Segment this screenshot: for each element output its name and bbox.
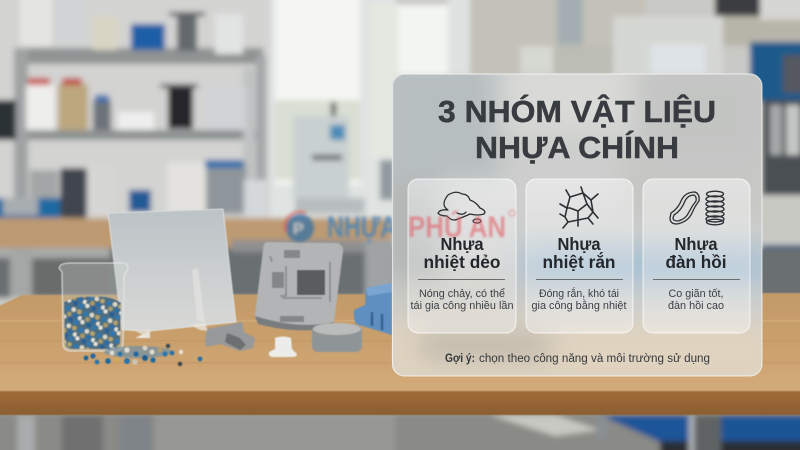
card description: Đóng rắn, khó tái — [539, 287, 619, 300]
card heading — [542, 234, 616, 272]
blue plastic part — [354, 283, 392, 335]
metal shelf — [14, 48, 266, 218]
card description: Co giãn tốt, — [668, 288, 724, 300]
footer hint: chọn theo công năng và môi trường sử dụng — [479, 353, 710, 365]
title: NHỰA CHÍNH — [475, 130, 679, 165]
card description: tái gia công nhiều lần — [410, 300, 514, 312]
card heading: nhiệt dẻo — [424, 252, 500, 272]
card description — [668, 288, 724, 312]
beaker with pellets — [59, 263, 128, 351]
card heading: Nhựa — [440, 234, 484, 254]
card heading: Nhựa — [558, 234, 601, 254]
card description — [532, 287, 626, 312]
watermark behind glass: logo and NHỰA — [285, 211, 397, 244]
card: nhựa đàn hồi — [643, 179, 750, 333]
grey screw cap — [312, 323, 362, 352]
window — [270, 0, 470, 230]
floor beneath table — [0, 412, 800, 450]
grey housing part — [255, 242, 343, 330]
grey clip part — [205, 322, 255, 351]
card description — [410, 288, 514, 312]
icon: melted plastic blob — [438, 192, 485, 223]
icon: cross-linked network — [560, 187, 598, 228]
icon: elastic loop — [670, 192, 699, 224]
card description: Nóng chảy, có thể — [419, 288, 505, 300]
title: 3 NHÓM VẬT LIỆU — [438, 93, 716, 129]
shelf items — [0, 0, 266, 224]
wooden table — [0, 293, 800, 415]
back bench — [0, 218, 392, 248]
icon: coil spring — [706, 191, 724, 225]
machine cabinet — [613, 0, 800, 295]
watermark behind glass: logo and NHỰA: P — [293, 221, 304, 238]
watermark PHÚ AN: PHÚ AN — [408, 210, 506, 244]
frosted plastic sheet — [108, 209, 236, 338]
card heading — [666, 234, 726, 272]
card heading: Nhựa — [674, 234, 718, 254]
card heading: nhiệt rắn — [542, 251, 616, 272]
lab press machine — [293, 102, 394, 214]
white fitting — [269, 336, 297, 357]
card description: gia công bằng nhiệt — [532, 299, 626, 312]
card: nhựa nhiệt dẻo — [408, 179, 516, 333]
watermark behind glass: logo and NHỰA: NHỰA — [327, 211, 397, 244]
footer hint: Gợi ý: — [445, 353, 475, 365]
loose pellets — [84, 344, 202, 366]
card heading: đàn hồi — [666, 252, 726, 272]
title — [438, 93, 716, 165]
card: nhựa nhiệt rắn — [526, 179, 633, 333]
card heading — [424, 234, 500, 272]
card description: đàn hồi cao — [668, 300, 724, 312]
glass panel — [392, 73, 763, 377]
plastic samples on the table — [59, 209, 392, 366]
